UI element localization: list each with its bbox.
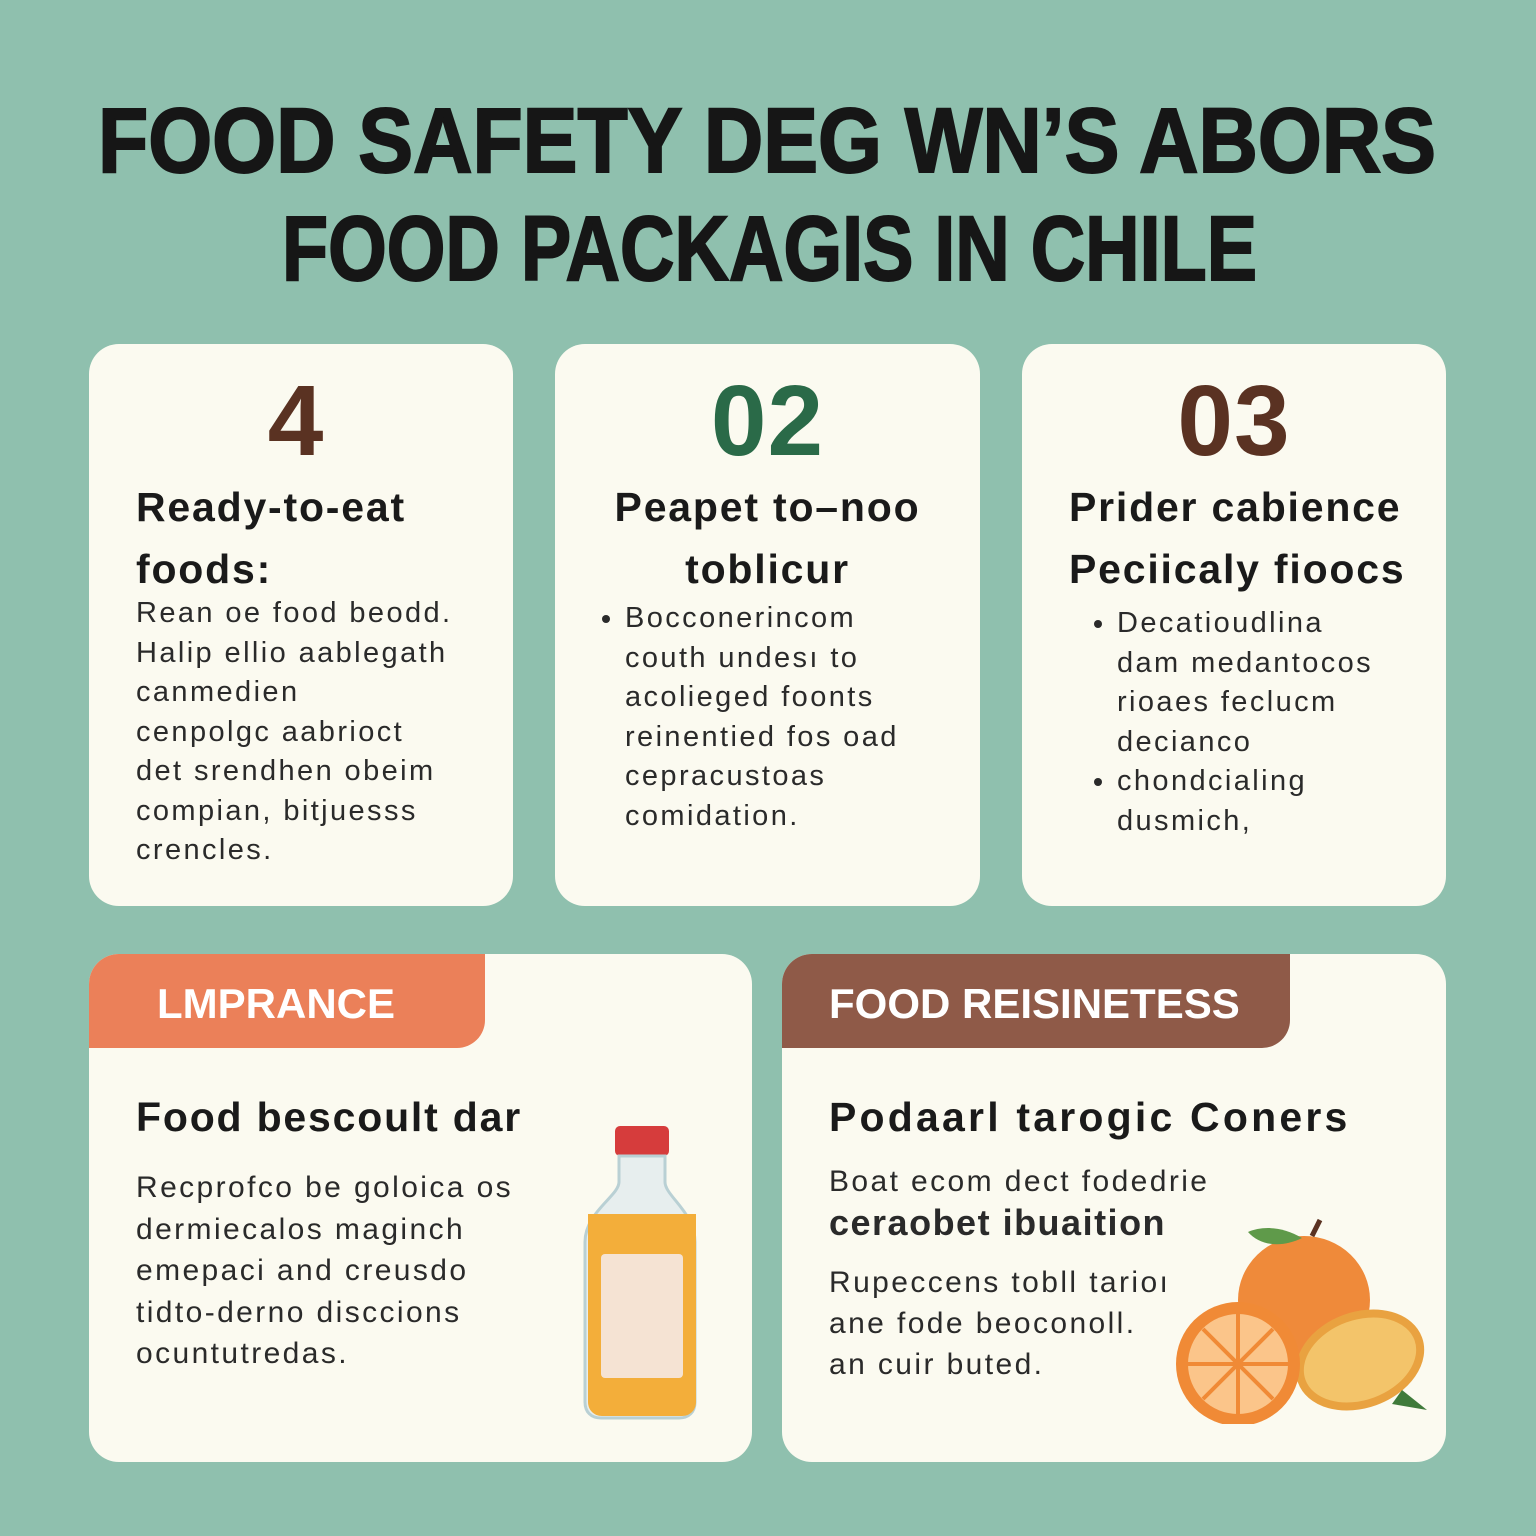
body 2: Bocconerincom <box>625 602 856 634</box>
body 2: acolieged foonts <box>625 681 875 713</box>
body 3: rioaes feclucm <box>1117 686 1338 718</box>
heading 2: Peapet to–noo <box>615 484 920 530</box>
body: ceraobet ibuaition <box>829 1202 1166 1243</box>
heading 1: Ready-to-eat <box>136 484 406 530</box>
body 1: cenpolgc aabrioct <box>136 716 404 748</box>
icon: bottle <box>584 1126 696 1420</box>
body 3: decianco <box>1117 726 1252 758</box>
body <box>829 1165 1209 1243</box>
body: Boat ecom dect fodedrie <box>829 1165 1209 1198</box>
body 2: cepracustoas <box>625 760 826 792</box>
heading 1: foods: <box>136 546 272 592</box>
body 1: compian, bitjuesss <box>136 794 418 826</box>
body 2 <box>829 1266 1170 1381</box>
body: tidto-derno disccions <box>136 1296 462 1328</box>
heading: Podaarl tarogic Coners <box>829 1094 1351 1140</box>
heading 3: Peciicaly fioocs <box>1069 546 1405 592</box>
number 4: 4 <box>268 365 324 477</box>
body 2: ane fode beoconoll. <box>829 1307 1136 1340</box>
body 2: reinentied fos oad <box>625 720 899 752</box>
body: emepaci and creusdo <box>136 1254 468 1287</box>
body 2: an cuir buted. <box>829 1348 1044 1381</box>
body <box>136 1171 513 1370</box>
heading 2: toblicur <box>685 546 850 592</box>
title: FOOD PACKAGIS IN CHILE <box>282 198 1257 300</box>
tab: FOOD REISINETESS: FOOD REISINETESS <box>829 980 1240 1027</box>
body: dermiecalos maginch <box>136 1212 465 1246</box>
body 2: couth undesı to <box>625 642 859 674</box>
tab: LMPRANCE: LMPRANCE <box>157 980 395 1027</box>
body 1 <box>136 597 452 866</box>
tab: FOOD REISINETESS <box>782 954 1290 1048</box>
body 2: Rupeccens tobll tarioı <box>829 1266 1170 1299</box>
panel: importance <box>89 954 752 1462</box>
panel: food resistance <box>782 954 1446 1462</box>
body 1: crencles. <box>136 834 274 866</box>
body 3: chondcialing <box>1117 765 1307 797</box>
body 3: dam medantocos <box>1117 646 1373 678</box>
body 3: dusmich, <box>1117 804 1252 836</box>
body: ocuntutredas. <box>136 1337 349 1370</box>
panel: card 3 <box>1022 344 1446 906</box>
body 1: Rean oe food beodd. <box>136 597 452 629</box>
body 1: Halip ellio aablegath <box>136 636 448 668</box>
icon: oranges <box>1176 1218 1427 1424</box>
body 2 <box>602 602 899 832</box>
panel: card 1 <box>89 344 513 906</box>
body 2: comidation. <box>625 800 800 832</box>
heading 3: Prider cabience <box>1069 484 1401 530</box>
number 02: 02 <box>711 365 824 477</box>
heading 1 <box>136 484 406 592</box>
body 3: Decatioudlina <box>1117 607 1324 639</box>
number 03: 03 <box>1177 365 1291 477</box>
tab: LMPRANCE <box>89 954 485 1048</box>
body 3 <box>1094 607 1373 836</box>
heading: Food bescoult dar <box>136 1094 522 1140</box>
panel: card 2 <box>555 344 980 906</box>
title <box>98 90 1436 300</box>
body 1: canmedien <box>136 676 299 708</box>
body: Recprofco be goloica os <box>136 1171 513 1204</box>
body 1: det srendhen obeim <box>136 755 436 787</box>
heading 2 <box>615 484 920 592</box>
heading 3 <box>1069 484 1405 592</box>
